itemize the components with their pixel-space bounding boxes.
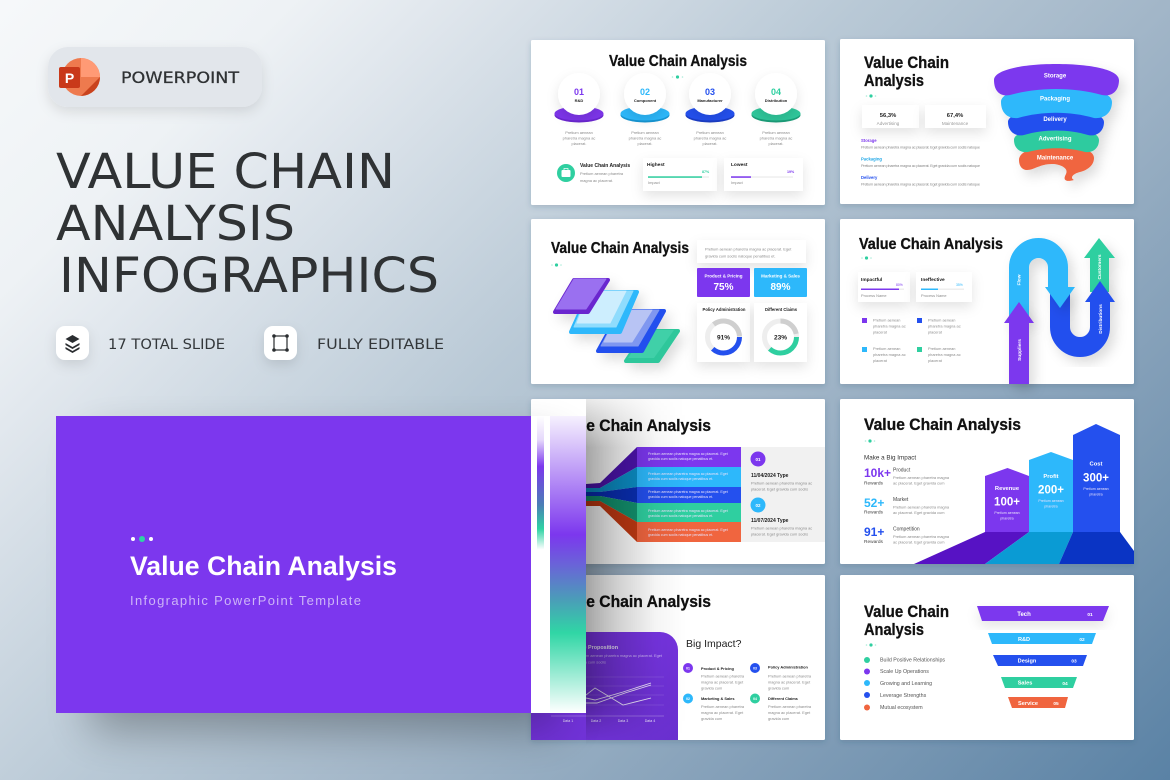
stage 04: 04: [771, 87, 781, 97]
ribbon fan: gravida cum sociis natoque penatibus et.: [648, 495, 713, 499]
stat: advertising: 56,3%: [880, 113, 896, 119]
legend: placerat: [928, 330, 943, 334]
step: tech: [977, 606, 1109, 621]
item 03: Pretium aenean pharetra: [701, 704, 745, 709]
stat: advertising: [862, 105, 919, 128]
stage 02: Pretium aenean: [631, 130, 659, 135]
legend: pharetra magna ac: [873, 324, 906, 328]
intro text: [697, 240, 806, 263]
panel: slide 2 curved funnel: [840, 39, 1134, 204]
main heading: INFOGRAPHICS: [59, 248, 439, 304]
step: tech: Tech: [1017, 612, 1031, 618]
purple chart block: Data 2: [591, 719, 601, 723]
side panel with dates: 11/04/2024 Type: [751, 473, 789, 479]
icon: PowerPoint logo: [59, 58, 100, 96]
legend: [862, 318, 961, 363]
side panel with dates: placerat. Eget gravida cum sociis: [751, 532, 808, 536]
card: lowest: 19%: [787, 170, 795, 174]
ribbon fan: gravida cum sociis natoque penatibus et.: [648, 533, 713, 537]
curved funnel: Delivery: [1043, 117, 1067, 123]
panel: slide 5 ribbons: [531, 399, 825, 564]
item 02: 03: [753, 666, 757, 670]
slide title: Analysis: [864, 620, 924, 639]
dots: [131, 536, 153, 542]
card: highest: Highest: [647, 162, 665, 168]
slide title: Value Chain Analysis: [551, 240, 689, 257]
stat: competition: [864, 525, 950, 545]
item 04: Different Claims: [768, 696, 798, 701]
legend: pharetra magna ac: [873, 352, 906, 357]
notes: Storage: [861, 138, 877, 143]
arrow: customers: Customers: [1097, 254, 1103, 280]
slide title: Value Chain Analysis: [554, 417, 711, 435]
side panel with dates: 11/07/2024 Type: [751, 518, 789, 524]
glass gradient strip: [531, 416, 586, 713]
panel: slide 6 rising arrows: [840, 399, 1134, 564]
slide title: [864, 53, 949, 90]
stat: product: Pretium aenean pharetra magna: [893, 475, 950, 480]
stat: market: Market: [893, 497, 909, 503]
panel: slide 4 winding arrows: [840, 219, 1134, 384]
notes: Pretium aenean pharetra magna ac placerat. Eget gravida cum sociis natoque: [861, 144, 980, 150]
slide title: Value Chain: [864, 53, 949, 72]
slide title: Value Chain: [864, 602, 949, 621]
notes: Pretium aenean pharetra magna ac placerat. Eget gravida cum sociis natoque: [861, 163, 980, 168]
item 04: [750, 694, 812, 721]
stat: advertising: Advertising: [877, 121, 900, 126]
purple chart block: Data 1: [563, 719, 573, 723]
item 01: Product & Pricing: [701, 666, 734, 671]
stage 04: pharetra magna ac: [760, 136, 792, 140]
ribbon fan: gravida cum sociis natoque penatibus et.: [648, 457, 713, 461]
bar: revenue: Revenue: [995, 486, 1020, 492]
dots: [861, 256, 872, 260]
card: lowest: Impact: [731, 180, 744, 185]
curved funnel: Storage: [1044, 74, 1067, 80]
card: impactful: 80%: [896, 283, 903, 287]
notes: [861, 138, 980, 186]
donut: different claims: Different Claims: [765, 307, 798, 312]
item 01: magna ac placerat. Eget: [701, 680, 744, 684]
slide title: [864, 602, 949, 639]
stat: competition: Rewards: [864, 539, 884, 545]
legend: Pretium aenean: [873, 318, 900, 322]
ribbon fan: Pretium aenean pharetra magna ac placerat. Eget: [648, 509, 728, 513]
step: sales: [1001, 677, 1077, 688]
stage 02: Component: [634, 98, 657, 103]
card: impactful: Impactful: [861, 277, 882, 283]
card: ineffective: 35%: [956, 283, 963, 287]
card: impactful: [858, 272, 910, 302]
intro text: Pretium aenean pharetra magna ac placerat. Eget: [705, 246, 792, 252]
cover title: Value Chain Analysis: [130, 551, 397, 581]
ribbon fan: Pretium aenean pharetra magna ac placerat. Eget: [648, 490, 728, 494]
stage 04: [752, 73, 800, 146]
arrow: suppliers: [1004, 302, 1034, 384]
purple chart block: Data 4: [645, 719, 655, 723]
dots: [672, 75, 683, 79]
panel: slide 1 stages: [531, 40, 825, 205]
stat: competition: Pretium aenean pharetra magna: [893, 534, 950, 539]
intro text: gravida cum sociis natoque penatibus et.: [705, 254, 776, 258]
main heading: ANALYSIS: [56, 196, 295, 252]
slide title: Analysis: [864, 71, 924, 90]
purple chart block: Value Proposition: [572, 645, 618, 651]
legend: placerat: [873, 330, 888, 334]
bar: cost: 300+: [1083, 472, 1109, 484]
item 03: [683, 694, 745, 721]
step: design: Design: [1018, 658, 1037, 664]
step: service: Service: [1018, 701, 1038, 707]
checklist: Scale Up Operations: [880, 669, 929, 675]
step: R&D: [988, 633, 1096, 644]
feature: total slides: [56, 326, 225, 360]
notes: Pretium aenean pharetra magna ac placerat. Eget gravida cum sociis natoque: [861, 182, 980, 186]
donut: policy administration: Policy Administration: [703, 307, 746, 312]
dots: [865, 439, 875, 443]
stat: market: 52+: [864, 496, 884, 510]
card: impactful: Process Name: [861, 293, 887, 298]
side panel with dates: 02: [755, 503, 761, 508]
curved funnel: Packaging: [1040, 96, 1070, 102]
item 03: magna ac placerat. Eget: [701, 710, 744, 715]
legend: placerat: [928, 358, 943, 363]
dots: [866, 643, 876, 647]
stat: maintenance: [925, 105, 986, 128]
feature: fully editable: FULLY EDITABLE: [317, 337, 444, 353]
arrow: flow: [1016, 248, 1075, 320]
stage 03: placerat.: [703, 141, 717, 146]
step: design: [993, 655, 1087, 666]
stage 03: Manufacturer: [697, 98, 723, 103]
step: service: 05: [1053, 701, 1059, 707]
stat: competition: Competition: [893, 526, 920, 532]
notes: Packaging: [861, 156, 882, 162]
stage 03: 03: [705, 87, 715, 97]
bar: revenue: 100+: [994, 496, 1020, 508]
summary with briefcase icon: [557, 163, 630, 183]
item 02: gravida cum: [768, 686, 789, 690]
side panel with dates: placerat. Eget gravida cum sociis: [751, 486, 808, 492]
checklist: Mutual ecosystem: [880, 705, 923, 711]
ribbon fan: gravida cum sociis natoque penatibus et.: [648, 477, 713, 481]
donut: different claims: [754, 303, 807, 362]
ribbon fan: Pretium aenean pharetra magna ac placerat. Eget: [648, 528, 728, 532]
arrow: flow: Flow: [1016, 274, 1022, 285]
item 03: Marketing & Sales: [701, 696, 735, 701]
badge: PowerPoint: [48, 47, 262, 107]
stage 04: Pretium aenean: [762, 130, 790, 135]
bar: cost: Pretium aenean: [1083, 487, 1109, 491]
stat: maintenance: 67,4%: [947, 113, 963, 119]
bar: cost: pharetra: [1089, 492, 1103, 496]
KPI: marketing and sales: 89%: [770, 282, 791, 293]
summary with briefcase icon: magna ac placerat.: [580, 178, 613, 183]
isometric layers: [555, 279, 678, 361]
donut: policy administration: 91%: [717, 334, 730, 342]
panel: slide 8 stepped funnel: [840, 575, 1134, 740]
bar: cost: [1073, 424, 1120, 532]
bar: profit: 200+: [1038, 484, 1064, 496]
slide title: Value Chain Analysis: [859, 236, 1003, 253]
stat: product: [864, 466, 950, 486]
stage 02: [620, 73, 670, 146]
icon: PowerPoint logo: P: [65, 70, 74, 86]
legend: Pretium aenean: [928, 318, 955, 322]
curved funnel: Maintenance: [1037, 156, 1074, 162]
main heading: VALUE CHAIN: [56, 144, 395, 200]
stat: product: ac placerat. Eget gravida cum: [893, 480, 944, 486]
stage 03: Pretium aenean: [696, 130, 724, 135]
stat: maintenance: Maintenance: [942, 121, 969, 126]
KPI: marketing and sales: Marketing & Sales: [761, 274, 800, 278]
card: ineffective: Process Name: [921, 293, 947, 298]
KPI: product and pricing: 75%: [713, 282, 734, 293]
legend: placerat: [873, 358, 888, 363]
stage 02: pharetra magna ac: [629, 136, 661, 140]
ribbon fan: gravida cum sociis natoque penatibus et.: [648, 514, 713, 518]
stage 01: placerat.: [572, 141, 586, 146]
arrow: distributions: [1060, 281, 1115, 347]
bar: profit: [1029, 452, 1073, 532]
stat: market: ac placerat. Eget gravida cum: [893, 510, 944, 515]
stat: competition: 91+: [864, 525, 884, 539]
bar: profit: Profit: [1043, 474, 1059, 480]
perspective floor: [914, 532, 1134, 564]
card: highest: Impact: [648, 180, 661, 185]
step: sales: 04: [1062, 681, 1068, 687]
item 04: Pretium aenean pharetra: [768, 704, 812, 709]
stat: market: Rewards: [864, 510, 884, 516]
stat: product: 10k+: [864, 466, 891, 480]
stage 01: 01: [574, 87, 584, 97]
donut: different claims: 23%: [774, 334, 787, 342]
KPI: product and pricing: [697, 268, 750, 297]
stage 02: 02: [640, 87, 650, 97]
panel: slide 3 layers and KPIs: [531, 219, 825, 384]
icon: editable shape: [272, 334, 289, 352]
badge label: POWERPOINT: [121, 68, 239, 87]
step: sales: Sales: [1018, 680, 1032, 686]
side panel with dates: Pretium aenean pharetra magna ac: [751, 526, 812, 530]
side panel with dates: Pretium aenean pharetra magna ac: [751, 480, 812, 486]
stat: market: Pretium aenean pharetra magna: [893, 504, 950, 510]
dots: [551, 263, 562, 267]
stage 04: placerat.: [769, 141, 783, 146]
step: design: 03: [1071, 658, 1077, 664]
stat: market: [864, 496, 950, 516]
feature: total slides: 17 TOTAL SLIDE: [108, 337, 225, 353]
slide title: Value Chain Analysis: [609, 53, 747, 70]
donut: policy administration: [697, 303, 750, 362]
item 03: 02: [686, 697, 690, 701]
bar: cost: Cost: [1090, 462, 1103, 468]
stage 03: pharetra magna ac: [694, 136, 726, 140]
purple chart block: gravida cum sociis: [574, 660, 606, 664]
step: tech: 01: [1087, 612, 1093, 618]
item 03: gravida cum: [701, 716, 722, 721]
stat: product: Rewards: [864, 480, 884, 486]
summary with briefcase icon: Value Chain Analysis: [580, 163, 630, 169]
step: R&D: 02: [1079, 637, 1085, 643]
legend: Pretium aenean: [928, 346, 955, 351]
step: R&D: R&D: [1018, 637, 1030, 643]
item 01: gravida cum: [701, 686, 722, 690]
purple chart block: [531, 632, 678, 740]
subheading: Make a Big Impact: [864, 454, 916, 462]
stat: competition: ac placerat. Eget gravida cum: [893, 540, 944, 544]
cover subtitle: Infographic PowerPoint Template: [130, 593, 361, 608]
bar: revenue: pharetra: [1000, 516, 1014, 520]
bar: revenue: [985, 468, 1029, 532]
legend: pharetra magna ac: [928, 324, 961, 328]
feature: fully editable: [264, 326, 444, 360]
checklist: [864, 657, 945, 711]
item 01: 01: [686, 666, 690, 670]
item 04: magna ac placerat. Eget: [768, 710, 811, 715]
slide title: Value Chain Analysis: [554, 593, 711, 611]
notes: Delivery: [861, 175, 878, 180]
stage 04: Distribution: [765, 98, 788, 103]
bar: profit: pharetra: [1044, 504, 1058, 508]
item 02: Pretium aenean pharetra: [768, 674, 812, 678]
checklist: Growing and Learning: [880, 681, 932, 687]
checklist: Build Positive Relationships: [880, 658, 945, 664]
side panel with dates: 01: [755, 457, 761, 462]
item 01: Pretium aenean pharetra: [701, 674, 745, 678]
ribbon fan: [586, 447, 741, 542]
card: lowest: [724, 158, 803, 191]
curved funnel: [994, 64, 1119, 181]
bar: revenue: Pretium aenean: [994, 511, 1020, 515]
card: ineffective: [916, 272, 972, 302]
heading: big impact: Big Impact?: [686, 638, 742, 650]
step: service: [1008, 697, 1068, 708]
purple chart block: Pretium aenean pharetra magna ac placerat. Eget: [576, 653, 663, 658]
item 02: magna ac placerat. Eget: [768, 680, 811, 684]
ribbon fan: Pretium aenean pharetra magna ac placerat. Eget: [648, 452, 728, 456]
purple chart block: Data 3: [618, 719, 628, 723]
stage 03: [686, 73, 734, 146]
KPI: product and pricing: Product & Pricing: [704, 274, 743, 278]
stage 02: placerat.: [638, 141, 652, 146]
summary with briefcase icon: Pretium aenean pharetra: [580, 171, 624, 176]
item 04: 04: [753, 697, 757, 701]
curved funnel: Advertising: [1038, 136, 1072, 142]
arrow: customers: [1084, 238, 1115, 292]
main heading: [56, 144, 439, 304]
checklist: Leverage Strengths: [880, 693, 927, 699]
stage 01: [554, 73, 604, 146]
dots: [866, 94, 876, 98]
panel: slide 7 proposition chart: [531, 575, 825, 740]
item 02: [750, 663, 812, 690]
item 02: Policy Administration: [768, 664, 808, 670]
ribbon fan: Pretium aenean pharetra magna ac placerat. Eget: [648, 472, 728, 476]
stage 01: R&D: [575, 98, 583, 103]
item 04: gravida cum: [768, 716, 789, 721]
card: lowest: Lowest: [731, 162, 748, 168]
arrow: suppliers: Suppliers: [1017, 339, 1023, 361]
KPI: marketing and sales: [754, 268, 807, 297]
card: highest: [643, 158, 717, 191]
legend: pharetra magna ac: [928, 352, 961, 357]
card: highest: 87%: [702, 170, 710, 174]
bar: profit: Pretium aenean: [1038, 499, 1064, 503]
item 01: [683, 663, 745, 690]
card: ineffective: Ineffective: [921, 277, 945, 283]
icon: layers: [66, 335, 80, 353]
slide title: Value Chain Analysis: [864, 416, 1021, 434]
arrow: distributions: Distributions: [1098, 304, 1104, 334]
side panel with dates: [741, 447, 825, 542]
stage 01: pharetra magna ac: [563, 136, 595, 140]
panel: purple cover: [56, 416, 531, 713]
stage 01: Pretium aenean: [565, 130, 593, 135]
stat: product: Product: [893, 468, 911, 474]
legend: Pretium aenean: [873, 346, 900, 351]
